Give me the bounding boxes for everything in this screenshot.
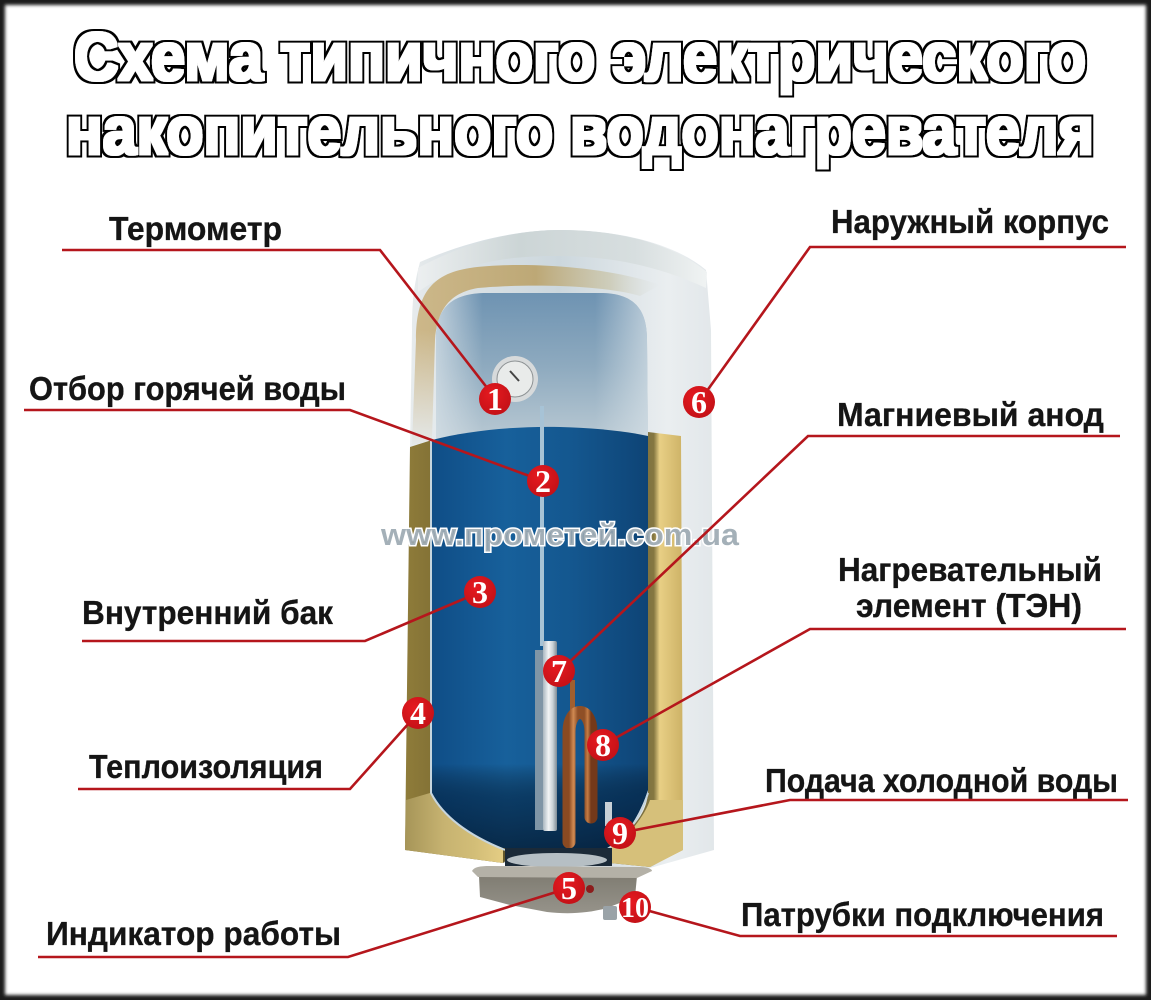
hot water pipe: [540, 406, 544, 646]
label: Индикатор работы: [38, 888, 569, 957]
connection pipe: [603, 906, 617, 920]
label: Отбор горячей воды: Отбор горячей воды: [29, 370, 346, 407]
left insulation: [405, 440, 520, 863]
label: Нагревательный элемент (ТЭН): [603, 551, 1126, 745]
label: Теплоизоляция: Теплоизоляция: [89, 748, 323, 785]
label: Подача холодной воды: [620, 762, 1128, 833]
upper tank side wash: [436, 293, 648, 440]
label: Нагревательный элемент (ТЭН): Нагревательный: [838, 551, 1102, 588]
bottom insulation left: [405, 793, 503, 863]
upper insulation arc: [412, 265, 660, 445]
upper tank section: [436, 293, 648, 440]
outer shell: [405, 230, 714, 868]
label: Внутренний бак: [82, 592, 480, 641]
badge 7: 7: [551, 653, 567, 689]
label: Теплоизоляция: [78, 713, 418, 789]
badge 6: 6: [691, 384, 707, 420]
label: Подача холодной воды: Подача холодной воды: [765, 762, 1118, 799]
number badges: [402, 381, 715, 924]
badge 3: [464, 574, 496, 610]
label: Магниевый анод: Магниевый анод: [837, 396, 1104, 433]
thermometer: [492, 356, 538, 402]
badge 4: 4: [410, 695, 426, 731]
magnesium anode: [535, 650, 543, 830]
label: Отбор горячей воды: [24, 370, 543, 481]
badge 3: 3: [472, 574, 488, 610]
label: Нагревательный элемент (ТЭН): элемент (ТЭН): [856, 587, 1082, 624]
flange: [505, 848, 612, 867]
insulation fade: [412, 330, 436, 445]
badge 8: 8: [595, 727, 611, 763]
badge 7: [543, 653, 575, 689]
label: Индикатор работы: Индикатор работы: [46, 915, 341, 952]
badge 2: [527, 463, 559, 499]
blue water tank: [430, 427, 648, 848]
badge 8: [587, 727, 619, 763]
badge 5: 5: [561, 870, 577, 906]
label: Патрубки подключения: Патрубки подключения: [741, 896, 1104, 933]
tank bottom shading: [430, 427, 648, 848]
website watermark: www.прометей.com.ua: [380, 517, 740, 552]
label: Термометр: [62, 210, 495, 398]
badge 4: [402, 695, 434, 731]
badge 1: 1: [487, 381, 503, 417]
sensor strip: [605, 802, 612, 826]
top cap: [418, 230, 707, 292]
label: Термометр: Термометр: [109, 210, 282, 247]
grey bottom cap: [472, 866, 652, 913]
label: Магниевый анод: [560, 396, 1120, 671]
badge 10: 10: [621, 893, 649, 924]
water heater illustration: [405, 230, 714, 920]
badge 1: [479, 381, 511, 417]
label: Наружный корпус: Наружный корпус: [831, 203, 1109, 240]
tank wall: [431, 440, 648, 850]
right insulation: [610, 432, 683, 867]
bottom insulation right: [610, 800, 683, 867]
badge 9: 9: [612, 815, 628, 851]
title: [66, 19, 1094, 169]
badge 5: [553, 870, 585, 906]
badge 9: [604, 815, 636, 851]
anode rod: [543, 641, 557, 831]
label: Наружный корпус: [699, 203, 1126, 402]
badge 6: [683, 384, 715, 420]
badge 2: 2: [535, 463, 551, 499]
label: Внутренний бак: Внутренний бак: [82, 594, 333, 631]
heating element: [569, 680, 591, 842]
